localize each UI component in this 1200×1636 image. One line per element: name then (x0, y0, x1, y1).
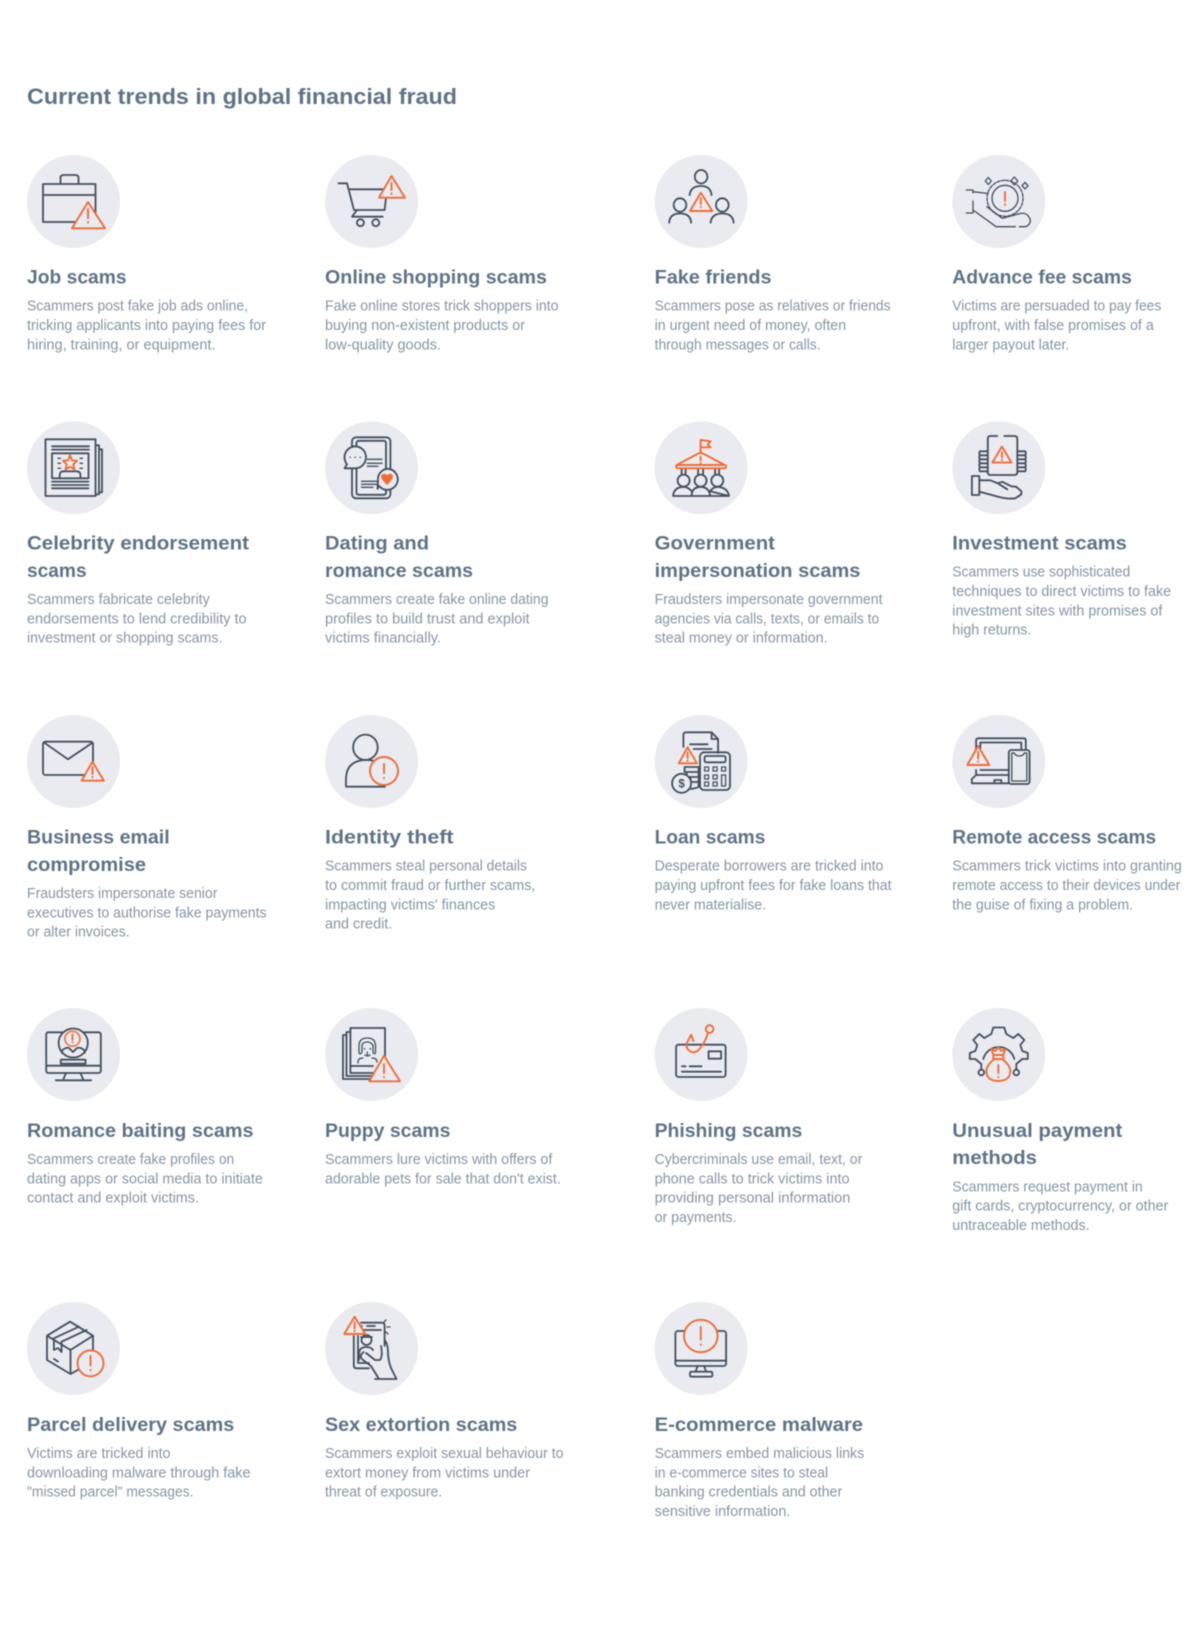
description: Scammers pose as relatives or friends (655, 299, 891, 315)
icon: government building with people (655, 421, 748, 514)
heading: Government (655, 532, 776, 554)
description (27, 1152, 263, 1207)
description: remote access to their devices under (952, 878, 1180, 894)
description: tricking applicants into paying fees for (27, 318, 266, 334)
heading: Dating and (325, 532, 429, 554)
description: "missed parcel" messages. (27, 1485, 194, 1501)
icon: envelope with warning (27, 715, 120, 808)
description: victims financially. (325, 631, 441, 647)
panel: dating and romance scams (325, 421, 548, 647)
description: gift cards, cryptocurrency, or other (952, 1199, 1168, 1215)
description: buying non-existent products or (325, 318, 525, 334)
description (325, 1446, 564, 1501)
description: in e-commerce sites to steal (655, 1465, 828, 1481)
description (27, 886, 267, 941)
description (27, 299, 266, 353)
description: low-quality goods. (325, 337, 441, 353)
panel: loan scams (655, 715, 892, 913)
heading: Investment scams (952, 532, 1127, 554)
icon: three people with warning (655, 155, 748, 248)
description: adorable pets for sale that don't exist. (325, 1171, 561, 1187)
panel: job scams (27, 155, 266, 353)
description: larger payout later. (952, 337, 1069, 353)
heading: Romance baiting scams (27, 1120, 254, 1142)
description: Fake online stores trick shoppers into (325, 299, 558, 315)
icon: dog photos with warning (325, 1008, 418, 1101)
description: investment or shopping scams. (27, 631, 222, 647)
icon: newspaper with star (27, 421, 120, 514)
description: the guise of fixing a problem. (952, 897, 1133, 913)
heading: Advance fee scams (952, 266, 1132, 288)
description: Scammers create fake profiles on (27, 1152, 234, 1168)
description: Scammers post fake job ads online, (27, 299, 248, 315)
heading: methods (952, 1147, 1037, 1169)
icon: monitor with alert (655, 1302, 748, 1395)
heading (325, 532, 473, 582)
panel: government impersonation scams (655, 421, 883, 647)
panel: romance baiting scams (27, 1008, 263, 1207)
panel: unusual payment methods (952, 1008, 1168, 1234)
description (655, 859, 892, 913)
heading: compromise (27, 854, 146, 876)
icon: laptop and phone with warning (952, 715, 1045, 808)
description (952, 565, 1171, 639)
description: profiles to build trust and exploit (325, 611, 530, 627)
icon: shopping cart with warning (325, 155, 418, 248)
panel: e-commerce malware (655, 1302, 864, 1520)
description: upfront, with false promises of a (952, 318, 1155, 334)
heading: Online shopping scams (325, 266, 547, 288)
heading (27, 532, 250, 582)
description: Desperate borrowers are tricked into (655, 859, 883, 875)
description: Victims are persuaded to pay fees (952, 299, 1161, 315)
heading (27, 826, 170, 876)
description: Scammers steal personal details (325, 859, 527, 875)
description: Scammers use sophisticated (952, 565, 1130, 581)
panel: advance fee scams (952, 155, 1161, 353)
description: Scammers embed malicious links (655, 1446, 864, 1462)
description: dating apps or social media to initiate (27, 1171, 263, 1187)
icon: document, calculator and coins: $ (678, 778, 685, 790)
description: and credit. (325, 917, 392, 933)
heading: Job scams (27, 266, 127, 288)
heading: Fake friends (655, 266, 772, 288)
icon: person with alert (325, 715, 418, 808)
panel: puppy scams (325, 1008, 561, 1187)
description: Scammers fabricate celebrity (27, 592, 210, 608)
icon: phone with chat bubbles (325, 421, 418, 514)
heading: Celebrity endorsement (27, 532, 250, 554)
heading: romance scams (325, 560, 473, 582)
heading: Identity theft (325, 826, 454, 848)
description: banking credentials and other (655, 1485, 842, 1501)
icon: credit card with hook (655, 1008, 748, 1101)
description: downloading malware through fake (27, 1465, 250, 1481)
heading: Puppy scams (325, 1120, 451, 1142)
description: executives to authorise fake payments (27, 905, 267, 921)
title: Current trends in global financial fraud (27, 84, 457, 109)
description: impacting victims' finances (325, 897, 495, 913)
description: contact and exploit victims. (27, 1191, 199, 1207)
description: or payments. (655, 1210, 737, 1226)
description (325, 1152, 561, 1187)
heading (655, 532, 861, 582)
description (655, 1446, 864, 1520)
heading: E-commerce malware (655, 1414, 863, 1436)
heading: Unusual payment (952, 1120, 1123, 1142)
description: Scammers lure victims with offers of (325, 1152, 553, 1168)
description: or alter invoices. (27, 925, 130, 941)
icon: briefcase with warning (27, 155, 120, 248)
panel: online shopping scams (325, 155, 558, 353)
heading: impersonation scams (655, 560, 861, 582)
description: providing personal information (655, 1191, 850, 1207)
panel: phishing scams (655, 1008, 862, 1226)
icon: hand with phone and coins (952, 421, 1045, 514)
description (325, 299, 558, 353)
description (655, 299, 891, 353)
description: endorsements to lend credibility to (27, 611, 247, 627)
description: phone calls to trick victims into (655, 1171, 850, 1187)
icon: hand holding coin (952, 155, 1045, 248)
icon: hand holding phone with warning (325, 1302, 418, 1395)
description: never materialise. (655, 897, 766, 913)
panel: investment scams (952, 421, 1171, 639)
panel: celebrity endorsement scams (27, 421, 250, 647)
heading: Remote access scams (952, 826, 1156, 848)
description: in urgent need of money, often (655, 318, 846, 334)
description: untraceable methods. (952, 1218, 1090, 1234)
description: Victims are tricked into (27, 1446, 170, 1462)
heading: Business email (27, 826, 170, 848)
description: Cybercriminals use email, text, or (655, 1152, 862, 1168)
description: techniques to direct victims to fake (952, 584, 1171, 600)
heading: Loan scams (655, 826, 766, 848)
description (952, 299, 1161, 353)
description: Fraudsters impersonate government (655, 592, 883, 608)
description: Scammers trick victims into granting (952, 859, 1182, 875)
icon: gear and money bag (952, 1008, 1045, 1101)
description: paying upfront fees for fake loans that (655, 878, 892, 894)
description (325, 859, 535, 933)
heading: Phishing scams (655, 1120, 802, 1142)
description: to commit fraud or further scams, (325, 878, 535, 894)
heading: Parcel delivery scams (27, 1414, 234, 1436)
panel: parcel delivery scams (27, 1302, 250, 1501)
description: Scammers create fake online dating (325, 592, 548, 608)
panel: fake friends (655, 155, 891, 353)
description (27, 1446, 250, 1501)
description: agencies via calls, texts, or emails to (655, 611, 879, 627)
heading (952, 1120, 1123, 1169)
icon: document, calculator and coins (655, 715, 748, 808)
icon: monitor with profile (27, 1008, 120, 1101)
description: through messages or calls. (655, 337, 821, 353)
description: steal money or information. (655, 631, 828, 647)
description: Fraudsters impersonate senior (27, 886, 218, 902)
panel: remote access scams (952, 715, 1182, 913)
description: Scammers request payment in (952, 1179, 1143, 1195)
description: hiring, training, or equipment. (27, 337, 216, 353)
description (325, 592, 548, 647)
description: high returns. (952, 623, 1031, 639)
heading: Sex extortion scams (325, 1414, 517, 1436)
icon: parcel box with alert (27, 1302, 120, 1395)
description: extort money from victims under (325, 1465, 530, 1481)
description (27, 592, 247, 647)
description (655, 592, 883, 647)
description (655, 1152, 862, 1226)
description: threat of exposure. (325, 1485, 442, 1501)
heading: scams (27, 560, 87, 582)
panel: business email compromise (27, 715, 267, 941)
description: Scammers exploit sexual behaviour to (325, 1446, 564, 1462)
panel: identity theft (325, 715, 535, 933)
description: investment sites with promises of (952, 603, 1163, 619)
description (952, 859, 1182, 913)
description (952, 1179, 1168, 1234)
panel: sex extortion scams (325, 1302, 564, 1501)
description: sensitive information. (655, 1504, 790, 1520)
